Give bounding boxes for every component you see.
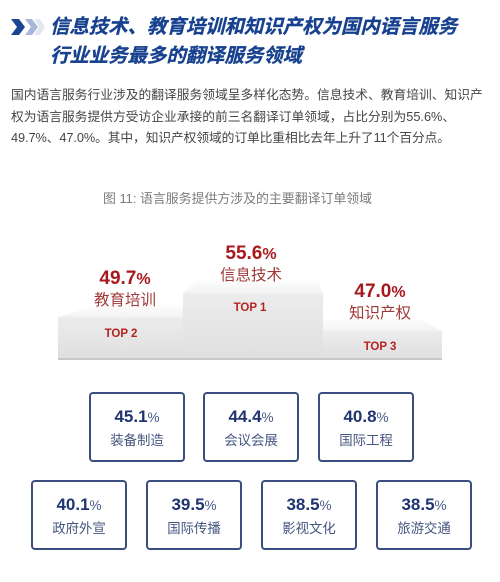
stat: 国际工程: 40.8%: [343, 407, 389, 426]
stat: 旅游交通: [376, 480, 472, 550]
top 1 label: [220, 243, 282, 314]
top 3 label: [349, 281, 411, 353]
stat: 政府外宣: [31, 480, 127, 550]
stat: 影视文化: 影视文化: [282, 521, 336, 536]
stat: 旅游交通: 38.5%: [401, 495, 447, 514]
stat: 影视文化: 38.5%: [286, 495, 332, 514]
podium chart: 知识产权: [349, 305, 411, 322]
title: 信息技术、教育培训和知识产权为国内语言服务: [50, 16, 457, 38]
podium chart: 49.7%: [99, 268, 151, 289]
intro text: 权为语言服务提供方受访企业承接的前三名翻译订单领域，占比分别为55.6%、: [11, 108, 455, 124]
stat: 国际工程: 国际工程: [339, 433, 393, 448]
stat: 政府外宣: 40.1%: [56, 495, 102, 514]
stat: 会议会展: 会议会展: [224, 433, 278, 448]
podium steps: [58, 288, 442, 360]
podium chart: 教育培训: [94, 292, 156, 309]
stat: 国际传播: [146, 480, 242, 550]
podium chart: 55.6%: [225, 243, 277, 264]
intro text: [11, 87, 483, 145]
stat: 国际工程: [318, 392, 414, 462]
stat: 政府外宣: 政府外宣: [52, 521, 106, 536]
stat: 装备制造: 装备制造: [110, 433, 164, 448]
stat: 会议会展: 44.4%: [228, 407, 274, 426]
stat: 国际传播: 国际传播: [167, 521, 221, 536]
icon: chevrons: [11, 19, 45, 35]
stat: 会议会展: [203, 392, 299, 462]
podium chart: TOP 2: [105, 328, 137, 340]
podium chart: [58, 243, 442, 360]
stat: 旅游交通: 旅游交通: [397, 521, 451, 536]
title: 行业业务最多的翻译服务领域: [50, 45, 302, 67]
podium chart: 信息技术: [220, 267, 282, 284]
stat: 影视文化: [261, 480, 357, 550]
intro text: 国内语言服务行业涉及的翻译服务领域呈多样化态势。信息技术、教育培训、知识产: [11, 87, 483, 102]
intro text: 49.7%、47.0%。其中，知识产权领域的订单比重相比去年上升了11个百分点。: [11, 130, 450, 145]
podium chart: TOP 1: [234, 302, 266, 314]
stat: 装备制造: [89, 392, 185, 462]
stat: 国际传播: 39.5%: [171, 495, 217, 514]
podium chart: 47.0%: [354, 281, 406, 302]
podium chart: TOP 3: [364, 341, 396, 353]
top 2 label: [94, 268, 156, 340]
stat: 装备制造: 45.1%: [114, 407, 160, 426]
chart caption: 图 11: 语言服务提供方涉及的主要翻译订单领域: [103, 191, 372, 206]
title: [50, 16, 460, 67]
